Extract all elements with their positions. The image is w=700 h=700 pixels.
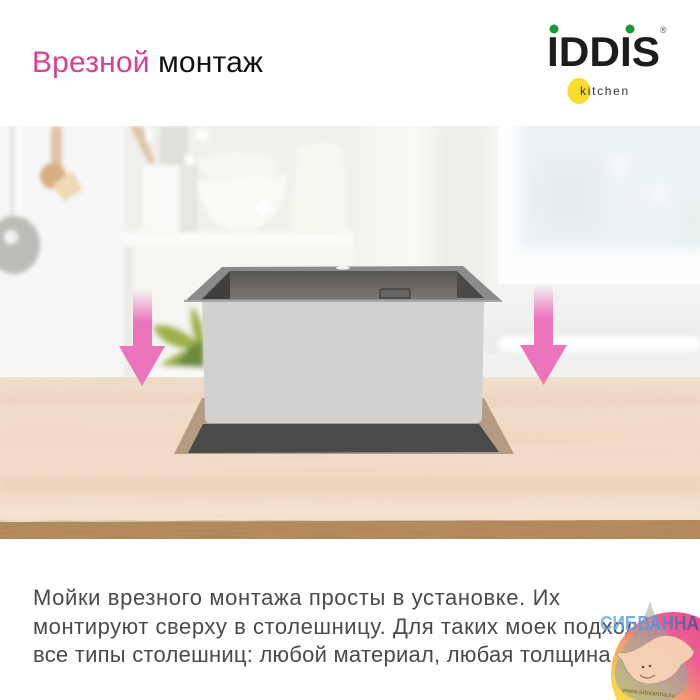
rim front lip — [184, 300, 502, 302]
curtains — [354, 126, 500, 377]
arrow: left — [119, 290, 165, 386]
utensil cup — [130, 126, 210, 232]
watermark url: www.sibvanna.ru — [621, 687, 675, 700]
title: Врезной монтаж — [32, 46, 263, 79]
white bowls — [198, 177, 284, 228]
wood grain bands — [1, 392, 699, 494]
sink inner back wall — [230, 271, 457, 299]
logo yellow blob — [568, 78, 590, 104]
sink inner left wall — [202, 271, 230, 299]
watermark water drop — [615, 600, 688, 700]
white sill strip — [498, 336, 700, 353]
left wall — [0, 126, 124, 377]
arrow: right — [520, 285, 567, 385]
sink body — [202, 301, 484, 423]
cut-out chipboard edges — [174, 398, 514, 454]
description text: все типы столешниц: любой материал, любая толщина. — [33, 642, 617, 667]
drain overflow box — [380, 289, 410, 298]
countertop — [0, 377, 700, 539]
logo kitchen word: kitchen — [580, 84, 630, 98]
description text: монтируют сверху в столешницу. Для таких моек подходят — [33, 614, 661, 639]
window — [498, 120, 700, 288]
watermark smiling bathtub — [617, 635, 694, 692]
wall below window — [493, 284, 700, 353]
counter front edge — [0, 520, 700, 539]
description text — [33, 585, 661, 667]
logo wordmark: IDDIS — [547, 28, 660, 75]
white pitcher — [292, 142, 346, 232]
logo: IDDIS kitchen — [547, 24, 667, 104]
shelf unit — [126, 248, 132, 376]
hanging wooden spoon and brush — [40, 126, 83, 201]
watermark: Сибванна — [600, 600, 700, 700]
cut-out in countertop — [174, 398, 514, 454]
description text: Мойки врезного монтажа просты в установке. Их — [33, 585, 560, 610]
green plant — [152, 304, 204, 370]
cut-out dark opening — [188, 424, 499, 453]
sink inner right wall — [457, 271, 484, 298]
hanging ladle — [0, 126, 40, 274]
watermark gradient disc — [611, 612, 700, 700]
registered mark: ® — [660, 25, 667, 35]
sink — [184, 266, 502, 423]
sink rim — [184, 266, 502, 302]
logo green dots — [550, 24, 634, 34]
faucet hole — [336, 266, 350, 270]
photo: blurred kitchen background — [0, 120, 700, 378]
